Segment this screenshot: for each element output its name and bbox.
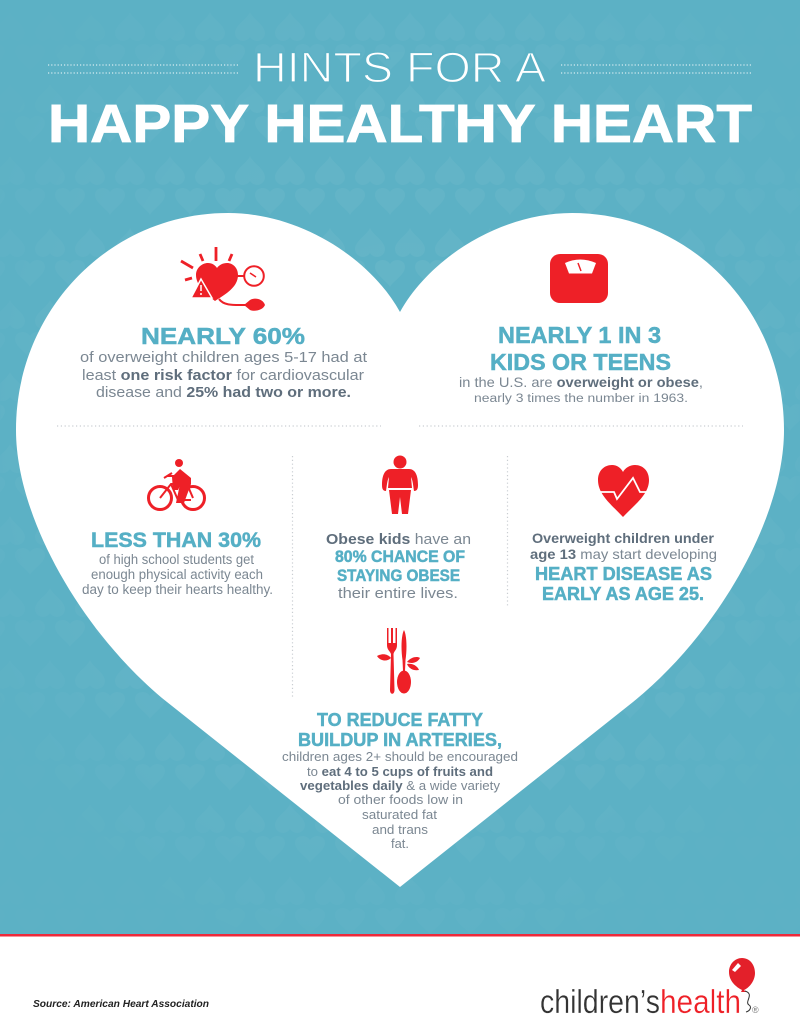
statement: heart disease: [530, 530, 717, 604]
icon: fork spoon and leaves: [377, 628, 420, 694]
panel: obese kids: [326, 456, 471, 602]
body text: physical activity: day to keep their hearts healthy.: [82, 582, 273, 597]
body text: risk factor: disease and 25% had two or more.: [96, 384, 351, 401]
statement: obese kids: STAYING OBESE: [337, 567, 460, 585]
heading: nearly 1 in 3 kids or teens: [490, 322, 671, 375]
panel: heart disease: [530, 465, 717, 604]
title: [48, 44, 752, 154]
statement: heart disease: age 13 may start developing: [530, 546, 717, 562]
body text: diet: children ages 2+ should be encouraged: [282, 750, 518, 764]
logo: children's health: [540, 958, 759, 1014]
icon: balloon: [729, 958, 759, 1014]
white heart panel: [16, 213, 784, 887]
body text: diet: to eat 4 to 5 cups of fruits and: [307, 765, 493, 779]
statement: obese kids: Obese kids have an: [326, 532, 471, 548]
heading: to reduce fatty buildup: TO REDUCE FATTY: [317, 709, 484, 730]
panel: physical activity: [82, 459, 273, 597]
body text: overweight kids: nearly 3 times the number in 1963.: [474, 393, 688, 405]
statement: heart disease: Overweight children under: [532, 530, 715, 546]
icon: scale: [550, 254, 608, 303]
panel: risk factor: [80, 247, 368, 401]
statement: heart disease: EARLY AS AGE 25.: [542, 584, 704, 604]
body text: diet: vegetables daily & a wide variety: [300, 779, 501, 793]
body text: risk factor: least one risk factor for cardiovascular: [82, 367, 364, 384]
heading: nearly 60%: NEARLY 60%: [141, 323, 305, 349]
footer rule: [0, 934, 800, 936]
title line: hints for a: HINTS FOR A: [253, 44, 546, 92]
icon: cyclist: [148, 459, 204, 510]
heading: to reduce fatty buildup: [298, 709, 502, 750]
icon: blood pressure heart: [181, 247, 265, 311]
source note: Source: American Heart Association: [33, 998, 209, 1010]
panel: overweight kids: [459, 254, 703, 405]
heading: nearly 1 in 3 kids or teens: NEARLY 1 IN 3: [498, 322, 661, 348]
body text: risk factor: of overweight children ages 5-17 had at: [80, 349, 368, 366]
body text: physical activity: [82, 552, 273, 597]
title line: happy healthy heart: HAPPY HEALTHY HEART: [48, 94, 752, 154]
statement: obese kids: 80% CHANCE OF: [335, 548, 465, 566]
body text: diet: [282, 750, 518, 851]
body text: physical activity: of high school students get: [99, 552, 254, 567]
heading: nearly 1 in 3 kids or teens: KIDS OR TEENS: [490, 349, 671, 375]
heading: to reduce fatty buildup: BUILDUP IN ARTERIES,: [298, 729, 502, 750]
body text: risk factor: [80, 349, 368, 401]
statement: obese kids: their entire lives.: [338, 586, 458, 602]
icon: person: [382, 456, 418, 514]
body text: diet: and trans: [372, 823, 428, 837]
statement: obese kids: [326, 532, 471, 602]
body text: overweight kids: in the U.S. are overweight or obese ,: [459, 374, 703, 390]
heading: less than 30%: LESS THAN 30%: [91, 529, 261, 552]
panel: diet: [282, 628, 518, 851]
body text: overweight kids: [459, 374, 703, 405]
body text: diet: of other foods low in: [338, 793, 463, 807]
body text: diet: fat.: [391, 837, 409, 851]
statement: heart disease: HEART DISEASE AS: [535, 564, 712, 584]
body text: physical activity: enough physical activity each: [91, 567, 263, 582]
body text: diet: saturated fat: [362, 808, 438, 822]
icon: heart with pulse: [598, 465, 650, 517]
